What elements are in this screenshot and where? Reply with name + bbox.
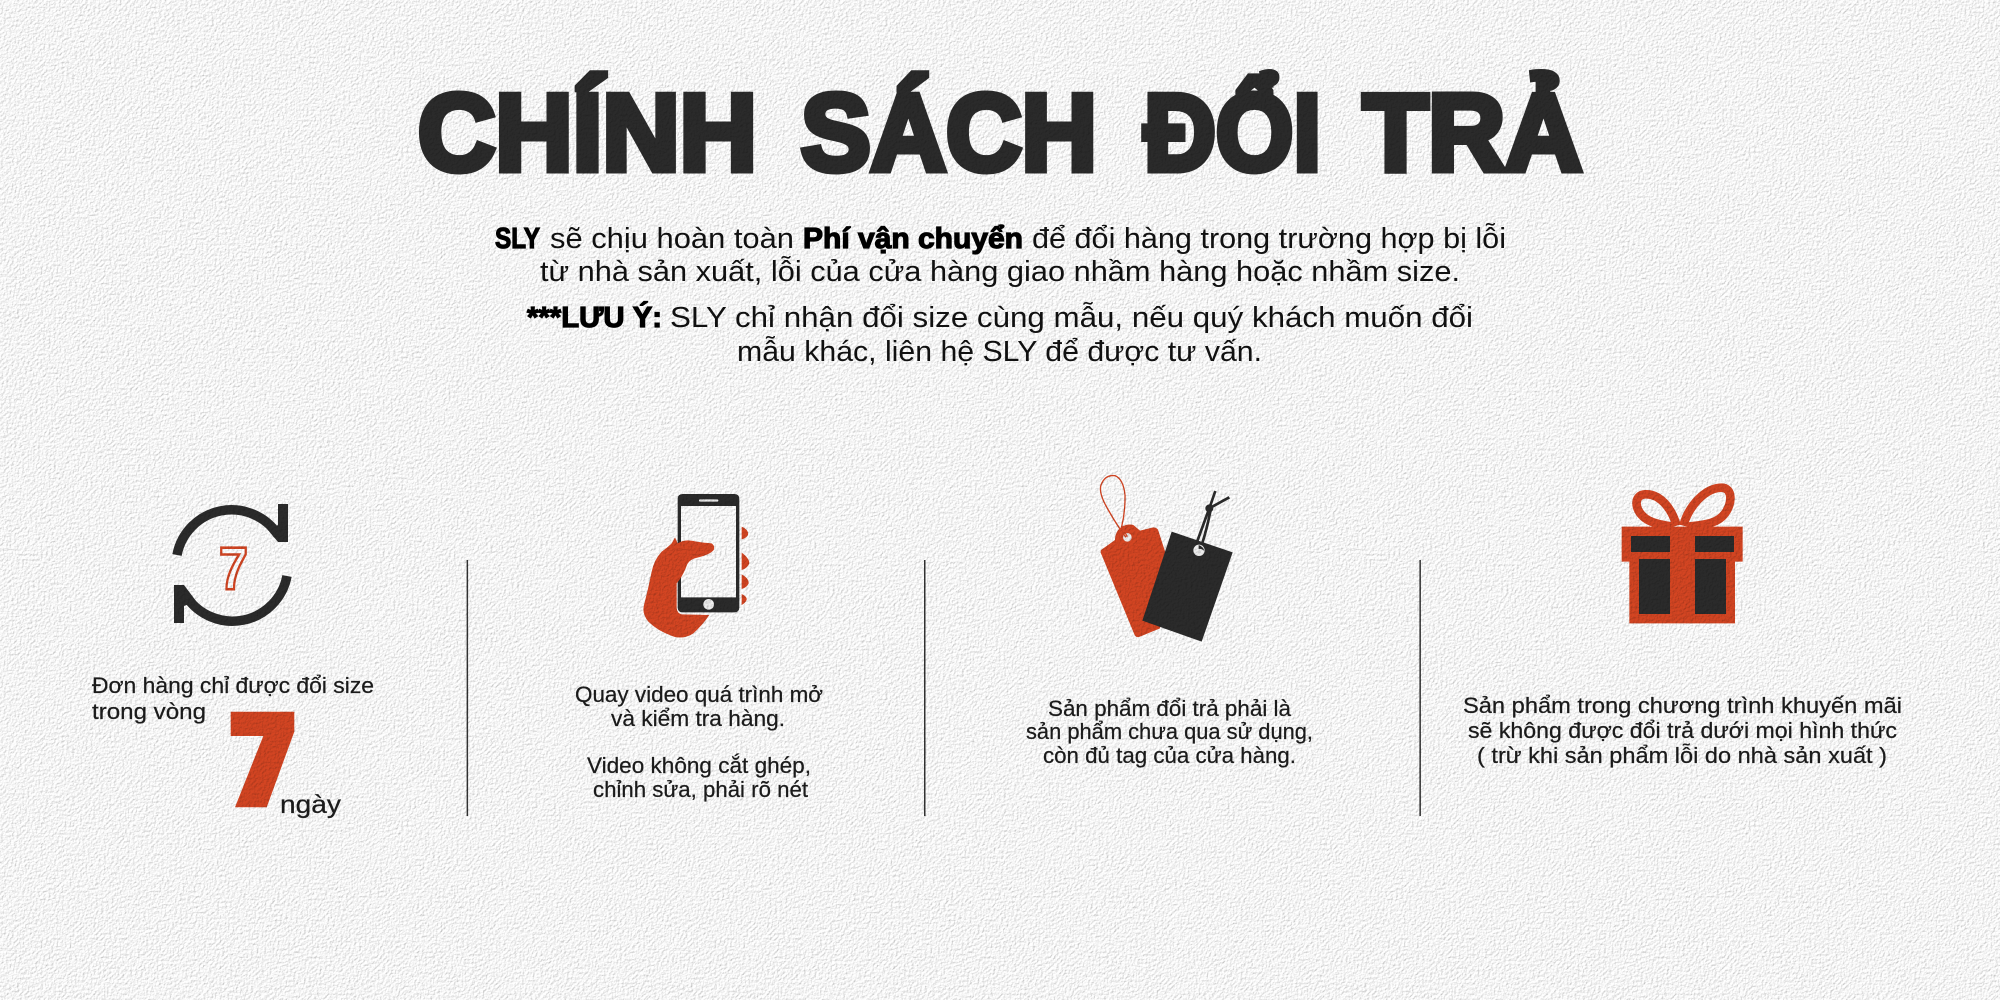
text: tag condition: sản phẩm chưa qua sử dụng, <box>1026 719 1313 744</box>
intro text block: sẽ chịu hoàn toàn <box>550 223 794 255</box>
text: video instructions: chỉnh sửa, phải rõ nét <box>593 777 809 802</box>
text: exchange condition: Đơn hàng chỉ được đổi size <box>92 673 374 698</box>
title: CHÍNH <box>418 72 757 194</box>
text: promotion condition: sẽ không được đổi trả dưới mọi hình thức <box>1468 718 1897 743</box>
text: promotion condition <box>1463 693 1902 768</box>
intro text block: SLY chỉ nhận đổi size cùng mẫu, nếu quý khách muốn đổi <box>670 301 1473 334</box>
text: days: ngày <box>280 791 342 819</box>
intro text block: từ nhà sản xuất, lỗi của cửa hàng giao nhầm hàng hoặc nhầm size. <box>540 255 1460 288</box>
text: promotion condition: Sản phẩm trong chương trình khuyến mãi <box>1463 693 1902 718</box>
text: video instructions: và kiểm tra hàng. <box>611 706 785 731</box>
panel: promotions <box>1463 488 1902 768</box>
panel: product tags <box>1026 476 1313 768</box>
intro text block <box>495 222 1506 368</box>
intro text block: ***LƯU Ý: <box>527 300 662 334</box>
intro text block: Phí vận chuyển <box>803 223 1023 255</box>
text: exchange condition: trong vòng <box>92 699 206 724</box>
text: video instructions: Quay video quá trình mở <box>575 682 823 707</box>
intro text block: SLY <box>495 223 540 255</box>
panel: 7-day exchange <box>92 504 374 829</box>
title: ĐỔI <box>1144 72 1321 194</box>
big number 7: 7 <box>238 695 288 829</box>
intro text block: mẫu khác, liên hệ SLY để được tư vấn. <box>737 335 1262 368</box>
divider 1 <box>467 560 468 816</box>
text: exchange condition <box>92 673 374 724</box>
divider 3 <box>1419 560 1421 816</box>
text: video instructions: Video không cắt ghép, <box>587 753 811 778</box>
text: tag condition: còn đủ tag của cửa hàng. <box>1043 743 1296 768</box>
divider 2 <box>924 560 926 816</box>
title: SÁCH <box>801 72 1097 194</box>
icon: hand holding phone <box>643 494 749 638</box>
panel: unboxing video <box>575 494 823 802</box>
text: video instructions <box>575 682 823 802</box>
icon: gift box <box>1622 488 1743 623</box>
icon: exchange arrows with 7: 7 <box>219 535 248 602</box>
text: tag condition <box>1026 696 1313 768</box>
title <box>418 72 1582 194</box>
title: TRẢ <box>1363 72 1582 194</box>
text: tag condition: Sản phẩm đổi trả phải là <box>1048 696 1291 721</box>
icon: exchange arrows with 7 <box>174 504 288 623</box>
intro text block: để đổi hàng trong trường hợp bị lỗi <box>1032 222 1506 255</box>
icon: two hang tags <box>1100 476 1233 642</box>
text: promotion condition: ( trừ khi sản phẩm lỗi do nhà sản xuất ) <box>1477 743 1887 768</box>
